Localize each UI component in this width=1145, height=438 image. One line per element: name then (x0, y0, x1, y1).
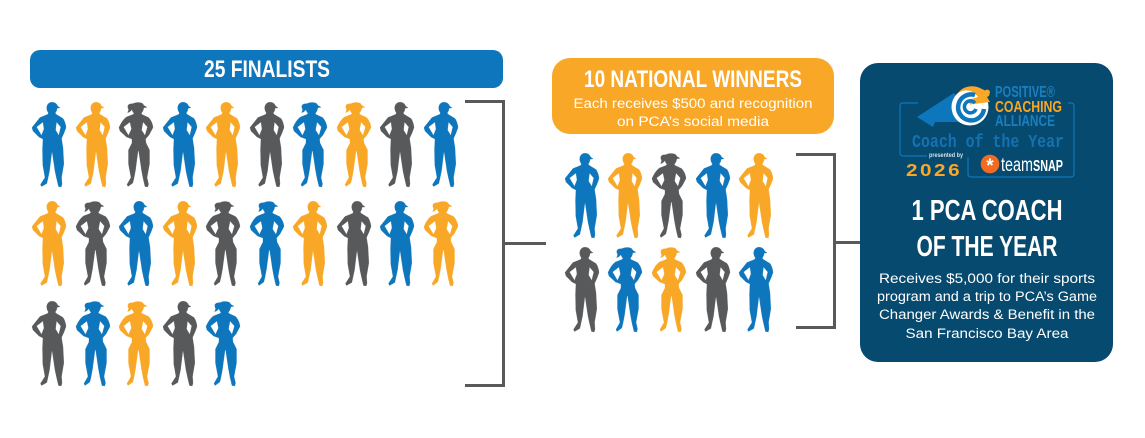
logo frame (900, 103, 1074, 177)
logo wordmark: POSITIVE® (995, 84, 1055, 101)
description text (877, 271, 1097, 341)
winners people grid (565, 153, 773, 332)
logo title: coach of the year: Coach of the Year (912, 133, 1064, 153)
logo: teamsnap: SNAP (1033, 158, 1063, 175)
description text: Changer Awards & Benefit in the (879, 307, 1095, 322)
heading: 1 PCA coach of the year: OF THE YEAR (916, 231, 1058, 263)
logo wordmark: ALLIANCE (995, 113, 1055, 130)
description text: program and a trip to PCA’s Game (877, 289, 1097, 304)
logo: teamsnap: * (986, 156, 994, 177)
bracket: finalists to winners (465, 102, 546, 386)
heading: 1 PCA coach of the year: 1 PCA COACH (912, 195, 1062, 227)
callout: 10 national winners: Each receives $500 and recognition (574, 96, 812, 111)
callout: 10 national winners: 10 NATIONAL WINNERS (584, 66, 802, 93)
logo wordmark: COACHING (995, 99, 1062, 116)
description text: San Francisco Bay Area (906, 326, 1069, 341)
bracket: winners to coach of the year (796, 154, 860, 328)
logo: presented by: presented by (929, 153, 964, 159)
logo: teamsnap: team (1001, 155, 1033, 176)
finalists people grid (32, 102, 458, 386)
description text: Receives $5,000 for their sports (879, 271, 1095, 286)
logo: teamsnap (981, 155, 1063, 177)
panel: 10 national winners (552, 58, 834, 332)
icon: whistle (917, 86, 990, 127)
heading: 25 finalists: 25 FINALISTS (204, 56, 330, 83)
logo: PCA coach of the year 2026 (900, 84, 1074, 181)
logo wordmark (995, 84, 1062, 130)
heading: 1 PCA coach of the year (912, 195, 1062, 263)
panel: 1 PCA coach of the year (860, 63, 1113, 362)
logo year: 2026 (906, 160, 960, 181)
callout: 10 national winners (552, 58, 834, 134)
panel: 25 finalists (30, 50, 503, 386)
heading: 25 finalists (30, 50, 503, 88)
callout: 10 national winners: on PCA’s social media (617, 114, 770, 129)
